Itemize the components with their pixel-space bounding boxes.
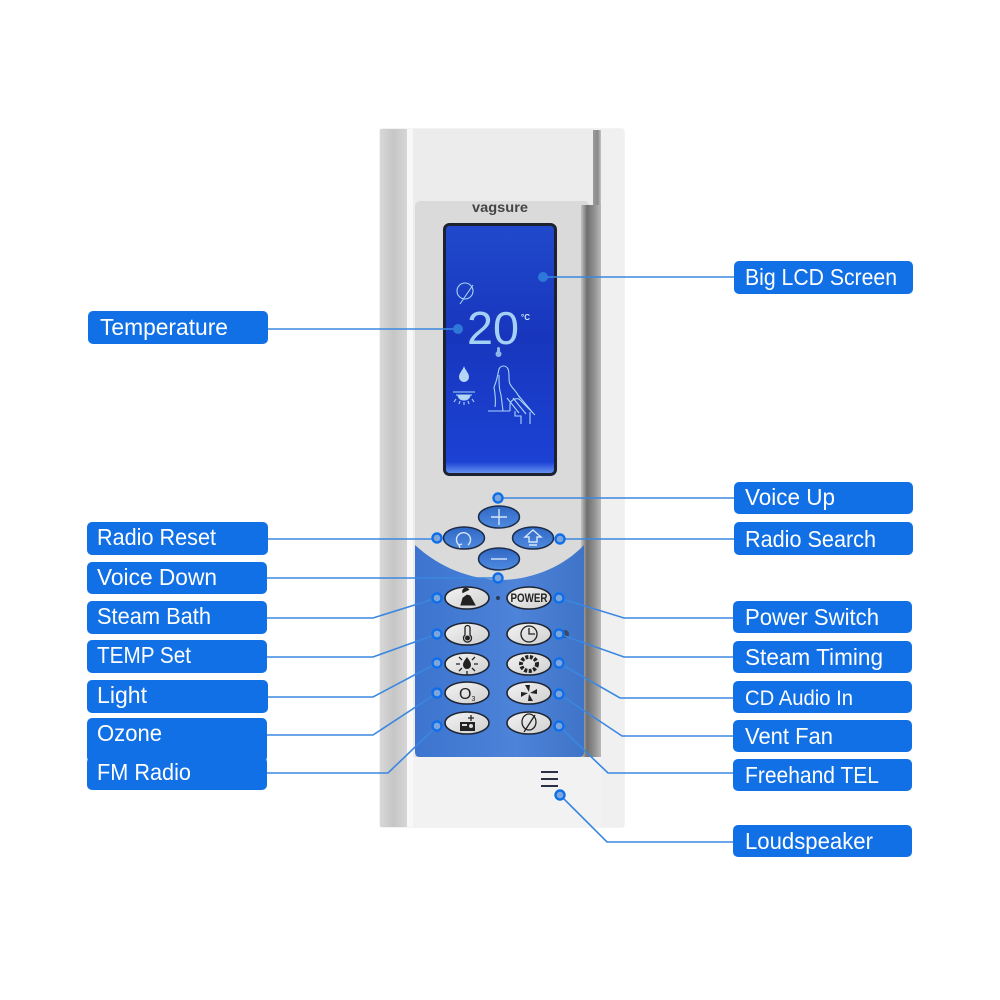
label: Voice Up: Voice Up bbox=[745, 484, 835, 510]
button: ozone: 3 bbox=[471, 696, 475, 703]
sensor bbox=[561, 630, 569, 638]
indicator light bbox=[496, 596, 500, 600]
degrees celsius unit: °C bbox=[521, 313, 530, 322]
icon: light on screen bbox=[453, 392, 475, 405]
label: Vent Fan bbox=[733, 720, 912, 752]
label: Freehand TEL: Freehand TEL bbox=[745, 762, 879, 788]
temperature reading: 20 bbox=[467, 302, 519, 354]
loudspeaker slots bbox=[541, 772, 558, 786]
button: temperature set bbox=[445, 623, 489, 645]
label: Radio Search bbox=[734, 522, 913, 555]
callout lines bbox=[267, 277, 734, 842]
callout dots bbox=[432, 272, 564, 800]
label: CD Audio In: CD Audio In bbox=[745, 687, 853, 710]
button: light bbox=[445, 653, 489, 675]
button: steam bath bbox=[445, 587, 489, 609]
label: Voice Down bbox=[87, 562, 267, 594]
label: Light: Light bbox=[97, 682, 148, 708]
label: TEMP Set bbox=[87, 640, 267, 673]
label: Big LCD Screen: Big LCD Screen bbox=[745, 264, 897, 290]
button: voice down bbox=[478, 548, 520, 570]
label: TEMP Set: TEMP Set bbox=[97, 642, 192, 668]
button: CD audio in bbox=[507, 653, 551, 675]
label: Steam Bath: Steam Bath bbox=[97, 603, 211, 629]
label: Steam Bath bbox=[87, 601, 267, 634]
button: radio reset bbox=[444, 527, 484, 549]
label: Light bbox=[87, 680, 268, 713]
label: Ozone bbox=[87, 718, 267, 762]
label: FM Radio bbox=[87, 757, 267, 790]
button: radio search bbox=[512, 527, 554, 549]
button: FM radio bbox=[445, 712, 489, 734]
device body bbox=[379, 128, 625, 828]
label: Temperature: Temperature bbox=[100, 314, 228, 340]
label: FM Radio: FM Radio bbox=[97, 759, 191, 785]
button: steam timing bbox=[507, 623, 551, 645]
label: Voice Down: Voice Down bbox=[97, 564, 217, 590]
label: CD Audio In bbox=[733, 681, 912, 713]
label: Radio Reset bbox=[87, 522, 268, 555]
button: voice up bbox=[478, 506, 520, 528]
brand name: vagsure bbox=[472, 199, 528, 215]
icon: seated figure bbox=[488, 366, 535, 424]
label: Voice Up bbox=[734, 482, 913, 514]
icon: thermometer on screen bbox=[496, 347, 502, 357]
icon: water drop on screen bbox=[459, 366, 469, 382]
label: Power Switch: Power Switch bbox=[745, 604, 879, 630]
label: Freehand TEL bbox=[733, 759, 912, 791]
label: Steam Timing: Steam Timing bbox=[745, 644, 883, 670]
label: Ozone: Ozone bbox=[97, 720, 162, 746]
inset control panel bbox=[415, 201, 601, 757]
label: Radio Search: Radio Search bbox=[745, 526, 876, 552]
button: power: POWER bbox=[510, 593, 548, 605]
label: Radio Reset: Radio Reset bbox=[97, 524, 217, 550]
label: Temperature bbox=[88, 311, 268, 344]
blue keypad area bbox=[415, 545, 584, 757]
label: Loudspeaker: Loudspeaker bbox=[745, 828, 873, 854]
label: Steam Timing bbox=[733, 641, 912, 673]
button: power bbox=[507, 587, 551, 609]
label: Vent Fan: Vent Fan bbox=[745, 723, 833, 749]
button: ozone bbox=[445, 682, 489, 704]
label: Loudspeaker bbox=[733, 825, 912, 857]
button: freehand telephone bbox=[507, 712, 551, 734]
LCD screen bbox=[444, 224, 556, 474]
button: ozone: O bbox=[459, 686, 471, 703]
label: Power Switch bbox=[733, 601, 912, 633]
icon: handset on screen bbox=[457, 283, 473, 304]
button: vent fan bbox=[507, 682, 551, 704]
